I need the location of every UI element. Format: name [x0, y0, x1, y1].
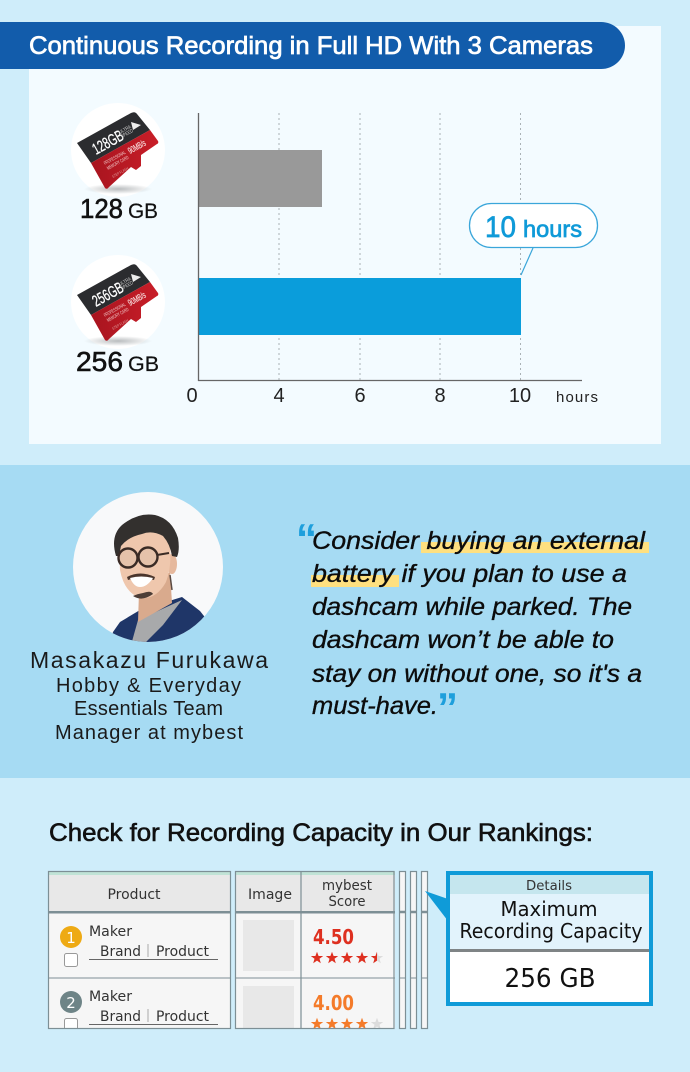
heading: rankings: Check for Recording Capacity in Our Rankings:	[49, 819, 593, 847]
axis labels: 10	[509, 385, 531, 407]
axis labels: 4	[273, 385, 285, 407]
row 1: Maker	[89, 924, 132, 940]
callout: 10 hours: hours	[523, 216, 582, 242]
smile	[130, 576, 153, 587]
icon: 128 GB memory card: 90MB/s	[126, 138, 148, 156]
title banner	[0, 22, 625, 69]
icon: 128 GB memory card: 128GB	[90, 128, 127, 158]
bar chart	[186, 113, 598, 407]
quote text: “	[296, 515, 317, 562]
icon: 128 GB memory card: STEP FLASH	[111, 166, 129, 179]
row 1	[60, 924, 218, 966]
label: 256 GB: GB	[128, 353, 159, 376]
rankings table: product column	[48, 871, 231, 1032]
row 1: Product	[156, 944, 210, 960]
sideburn shadow	[170, 575, 172, 590]
row 1: Brand	[100, 944, 141, 960]
label: 128 GB	[80, 193, 158, 224]
t-shirt	[131, 600, 182, 645]
quote text	[296, 515, 649, 731]
quote text: Consider buying an external	[312, 527, 647, 555]
glasses	[118, 548, 138, 568]
row 2: Product	[156, 1009, 210, 1025]
icon: 256 GB memory card	[71, 255, 165, 349]
icon: 128 GB memory card	[71, 103, 165, 197]
score 4.00	[310, 994, 383, 1028]
callout: details card: Recording Capacity	[460, 919, 643, 943]
callout: details card: Details	[526, 878, 572, 894]
callout: 10 hours	[470, 204, 598, 275]
axis labels	[186, 385, 598, 407]
cardigan	[112, 597, 204, 642]
row 2: 2	[66, 994, 76, 1012]
bar: 256 GB	[198, 278, 521, 335]
panel: recording chart	[0, 22, 661, 444]
icon: 128 GB memory card: ULTRA	[118, 124, 133, 136]
rankings table: product column: Product	[108, 887, 161, 903]
title banner: Continuous Recording in Full HD With 3 Cameras	[29, 32, 593, 60]
quote text: dashcam won’t be able to	[312, 626, 614, 654]
rankings table: collapsed columns	[399, 872, 428, 1028]
bar: 128 GB	[198, 150, 322, 207]
rankings table: image and score columns: Score	[328, 894, 366, 910]
callout: details card	[425, 873, 651, 1004]
icon: 128 GB memory card: PROFESSIONAL	[103, 150, 127, 167]
icon: 256 GB memory card: 256GB	[90, 280, 127, 310]
icon: 256 GB memory card: MEMORY CARD	[106, 307, 130, 324]
row 2: Brand	[100, 1009, 141, 1025]
expert name and role: Masakazu Furukawa	[30, 647, 268, 673]
icon: 256 GB memory card: 90MB/s	[126, 290, 148, 308]
moustache	[127, 574, 155, 580]
rankings table: image and score columns: mybest	[322, 878, 372, 894]
expert name and role: Essentials Team	[74, 698, 223, 720]
ear	[169, 554, 177, 574]
score 4.50	[311, 925, 383, 963]
quote text: battery if you plan to use a	[312, 560, 627, 588]
row 1: 1	[66, 929, 76, 947]
quote text: ”	[437, 684, 458, 731]
icon: 256 GB memory card: SPEED	[120, 280, 135, 292]
expert name and role: Hobby & Everyday	[56, 675, 241, 697]
icon: 128 GB memory card: MEMORY CARD	[106, 155, 130, 172]
row 2: Maker	[89, 989, 132, 1005]
label: 128 GB: 128	[80, 193, 123, 224]
callout: details card: 256 GB	[504, 964, 596, 994]
neck	[138, 572, 172, 622]
rankings table: image and score columns	[235, 871, 395, 1037]
expert portrait	[73, 492, 223, 650]
expert name and role	[30, 647, 268, 744]
label: 128 GB: GB	[128, 200, 158, 223]
axis labels: 8	[434, 385, 446, 407]
axis labels: 6	[354, 385, 366, 407]
row 2	[60, 990, 218, 1028]
score 4.50: 4.50	[313, 925, 354, 949]
panel: expert quote	[0, 465, 690, 778]
expert name and role: Manager at mybest	[55, 722, 243, 744]
score 4.00: 4.00	[313, 991, 354, 1015]
callout: 10 hours: 10	[485, 211, 516, 244]
face	[119, 531, 170, 598]
icon: 256 GB memory card: ULTRA	[118, 276, 133, 288]
quote text: stay on without one, so it's a	[312, 660, 642, 688]
rankings table: image and score columns: Image	[248, 887, 292, 903]
quote text: dashcam while parked. The	[312, 593, 632, 621]
axis labels: 0	[186, 385, 198, 407]
axis labels: hours	[556, 389, 598, 406]
callout: details card: Maximum	[500, 897, 598, 921]
icon: 256 GB memory card: STEP FLASH	[111, 318, 129, 331]
icon: 256 GB memory card: PROFESSIONAL	[103, 302, 127, 319]
quote text: must-have.	[312, 692, 438, 720]
label: 256 GB: 256	[76, 346, 123, 377]
label: 256 GB	[76, 346, 159, 377]
hair	[114, 514, 179, 557]
icon: 128 GB memory card: SPEED	[120, 128, 135, 140]
